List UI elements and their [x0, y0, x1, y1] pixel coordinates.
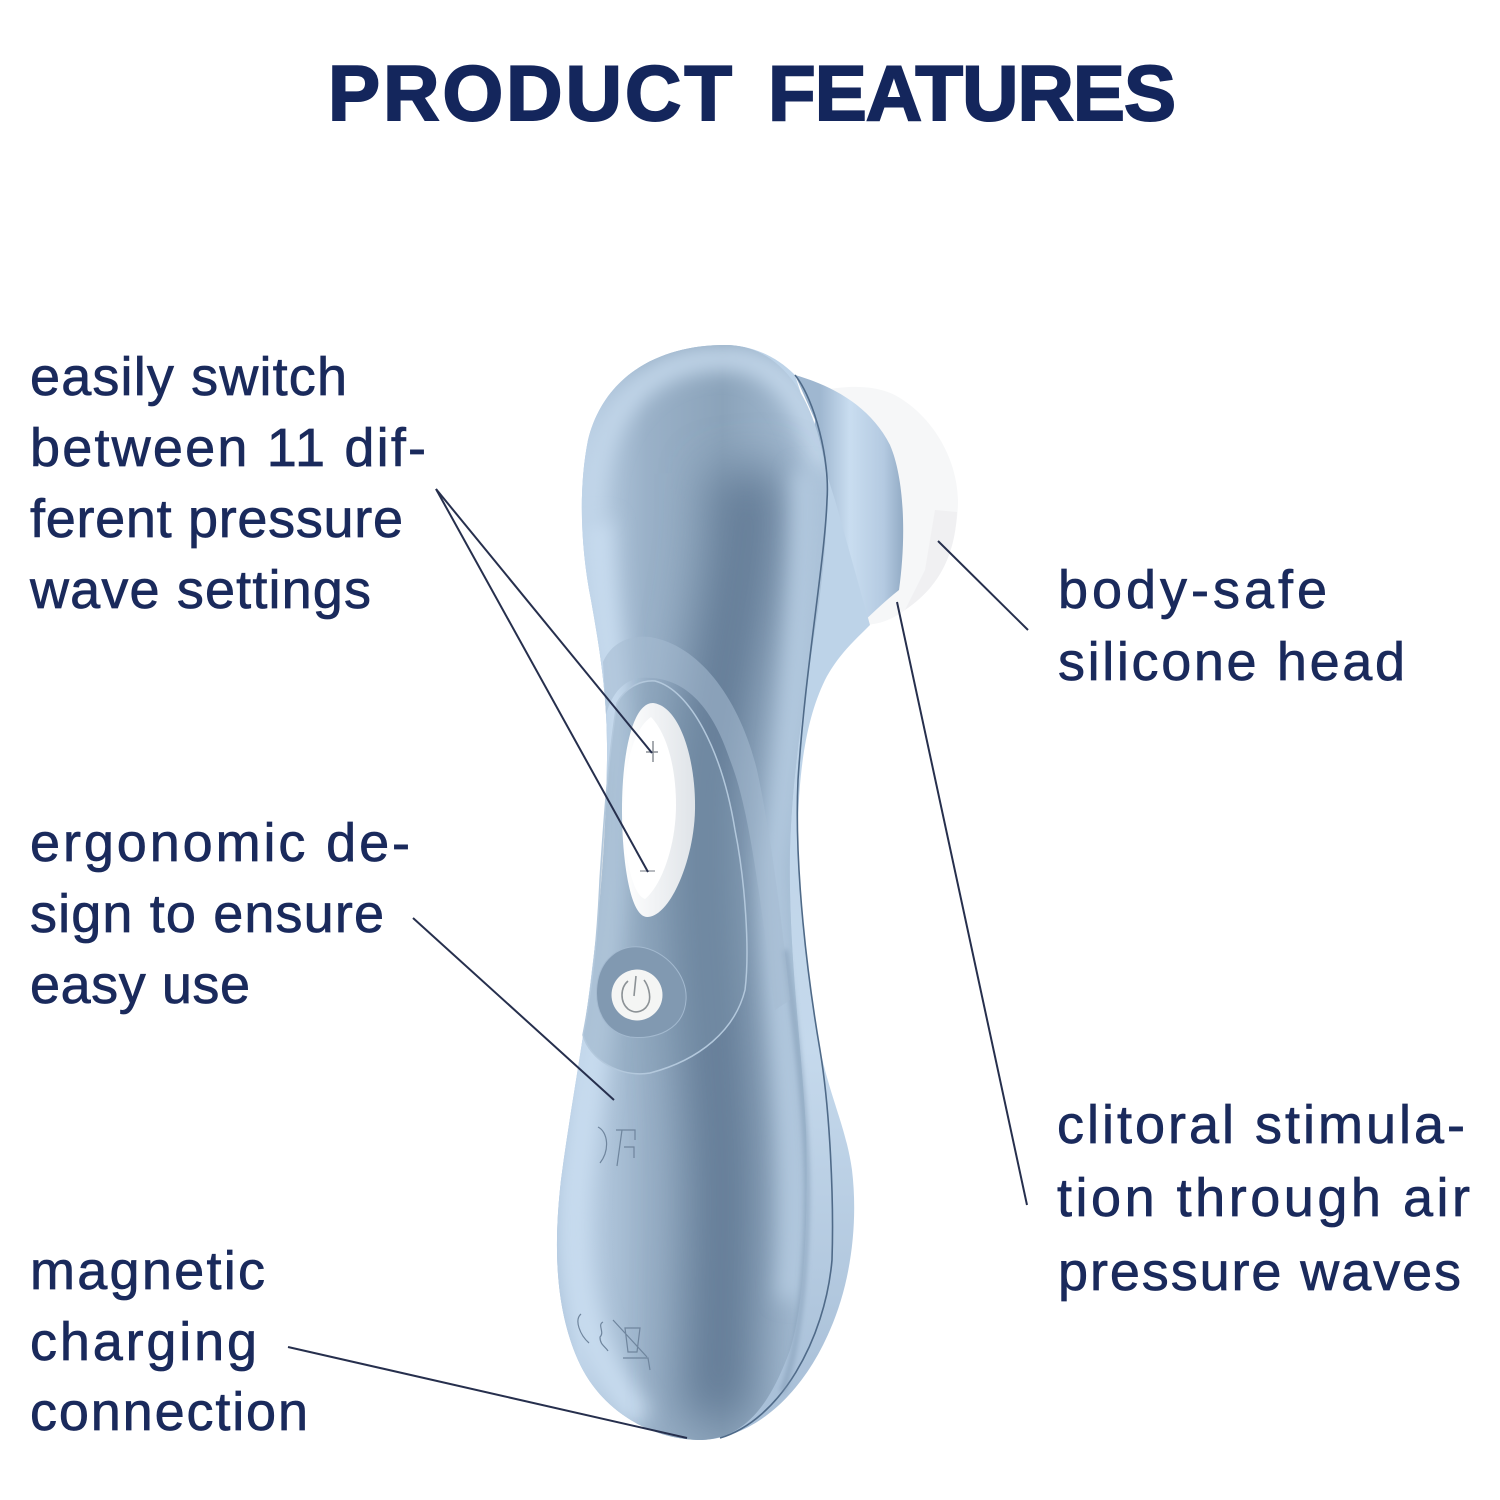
title: PRODUCT: [328, 49, 732, 137]
text: magnetic charging: charging: [30, 1312, 257, 1372]
minus mark: [640, 870, 655, 872]
leader line: ergonomic design: [413, 918, 614, 1100]
product illustration: [540, 340, 958, 1450]
text: pressure settings: [29, 347, 426, 620]
text: pressure settings: between 11 dif-: [30, 418, 426, 478]
plus mark: [646, 741, 658, 762]
text: silicone head: [1058, 560, 1405, 692]
leader line: silicone head: [938, 541, 1028, 630]
text: pressure settings: ferent pressure: [30, 489, 403, 549]
text: silicone head: silicone head: [1058, 632, 1405, 692]
text: clitoral stimulation: [1057, 1095, 1470, 1302]
text: ergonomic design: ergonomic de-: [30, 813, 410, 873]
power icon: [622, 976, 650, 1012]
text: clitoral stimulation: tion through air: [1057, 1168, 1470, 1228]
title: [328, 49, 1176, 137]
head shading: [905, 510, 957, 610]
text: ergonomic design: sign to ensure: [30, 884, 384, 944]
text: pressure settings: wave settings: [29, 560, 371, 620]
embossed CE and disposal marks: [578, 1314, 650, 1370]
text: silicone head: body-safe: [1058, 560, 1327, 620]
front face: [557, 345, 826, 1440]
neck: [795, 375, 903, 650]
seam lines: [720, 375, 832, 1438]
text: ergonomic design: easy use: [30, 955, 250, 1015]
power button: [597, 947, 686, 1038]
text: magnetic charging: [30, 1241, 308, 1442]
control panel: [583, 681, 747, 1074]
title: FEATURES: [768, 49, 1176, 137]
leader line: clitoral stimulation: [897, 602, 1027, 1205]
silicone head: [825, 387, 958, 625]
text: pressure settings: easily switch: [30, 347, 347, 407]
control panel outer band: [603, 637, 790, 1010]
leader lines: pressure settings: [436, 489, 652, 872]
white pressure button: [622, 703, 695, 917]
text: ergonomic design: [30, 813, 410, 1015]
text: magnetic charging: connection: [30, 1382, 308, 1442]
embossed logo: [598, 1127, 635, 1166]
text: clitoral stimulation: clitoral stimula-: [1057, 1095, 1465, 1155]
main body: [557, 345, 870, 1440]
text: clitoral stimulation: pressure waves: [1058, 1242, 1461, 1302]
text: magnetic charging: magnetic: [30, 1241, 265, 1301]
leader line: magnetic charging: [288, 1347, 687, 1438]
